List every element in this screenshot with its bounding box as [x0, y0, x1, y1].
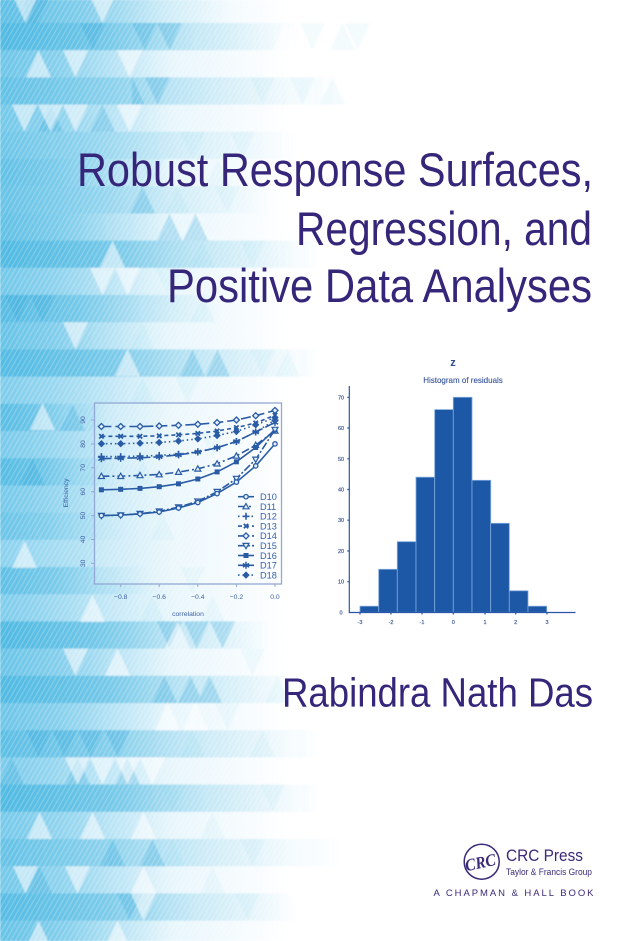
- axis tick labels: 2: [514, 620, 517, 626]
- author name: Rabindra Nath Das: [282, 670, 593, 716]
- plot frame: [94, 403, 282, 584]
- data series D10 to D18: [101, 410, 275, 516]
- axis tick labels: 70: [338, 395, 344, 401]
- chart titles: Histogram of residuals: [423, 376, 503, 385]
- axis labels and ticks: 50: [80, 512, 87, 519]
- axis labels and ticks: 0.0: [270, 594, 280, 601]
- bars: [360, 397, 547, 612]
- axis labels and ticks: −0.6: [152, 594, 166, 601]
- axis tick labels: 30: [338, 518, 344, 524]
- legend: D15: [260, 541, 277, 551]
- title: Positive Data Analyses: [167, 259, 592, 312]
- chart titles: z: [450, 357, 456, 369]
- title: [77, 143, 593, 312]
- axis tick labels: -2: [389, 620, 393, 626]
- publisher name: CRC Press: [506, 846, 583, 865]
- axis labels and ticks: −0.4: [191, 594, 205, 601]
- axis labels and ticks: −0.2: [230, 594, 243, 601]
- publisher logo: CRC Press: [434, 844, 594, 899]
- legend: D13: [260, 521, 277, 531]
- axis labels and ticks: Efficiency: [63, 478, 70, 507]
- axis tick labels: -1: [420, 620, 424, 626]
- legend: [238, 492, 277, 580]
- axis labels and ticks: correlation: [172, 611, 204, 618]
- axis tick labels: 0: [452, 620, 455, 626]
- axis tick labels: 0: [339, 610, 343, 616]
- publisher group: Taylor & Francis Group: [506, 867, 592, 878]
- axis tick labels: 50: [338, 457, 344, 463]
- legend: D16: [260, 551, 277, 561]
- axis labels and ticks: 70: [80, 464, 87, 472]
- axis tick labels: [338, 395, 549, 626]
- legend: D14: [260, 531, 277, 541]
- legend: D12: [260, 512, 277, 522]
- axis labels and ticks: 60: [80, 488, 87, 495]
- axis tick labels: 20: [338, 549, 344, 555]
- axis labels and ticks: 90: [80, 416, 87, 424]
- axis labels and ticks: 40: [80, 536, 87, 543]
- axis labels and ticks: 30: [80, 559, 87, 567]
- title: Regression, and: [296, 202, 592, 255]
- imprint line: A CHAPMAN & HALL BOOK: [434, 888, 594, 899]
- axes: [347, 386, 576, 614]
- axis tick labels: 40: [338, 488, 344, 494]
- axis labels and ticks: −0.8: [114, 594, 128, 601]
- icon: CRC circle: CRC: [463, 850, 498, 875]
- legend: D18: [260, 570, 277, 580]
- axis tick labels: -3: [358, 620, 362, 626]
- axis tick labels: 1: [483, 620, 487, 626]
- axis tick labels: 60: [338, 426, 344, 432]
- legend: D17: [260, 561, 277, 571]
- line chart: efficiency vs correlation: [63, 403, 282, 618]
- axis labels and ticks: [63, 416, 280, 618]
- axis labels and ticks: 80: [80, 440, 87, 448]
- axis tick labels: 3: [545, 620, 549, 626]
- histogram of residuals: [338, 357, 576, 626]
- chart titles: [423, 357, 503, 385]
- axis tick labels: 10: [338, 580, 344, 586]
- legend: D11: [260, 502, 276, 512]
- legend: D10: [260, 492, 277, 502]
